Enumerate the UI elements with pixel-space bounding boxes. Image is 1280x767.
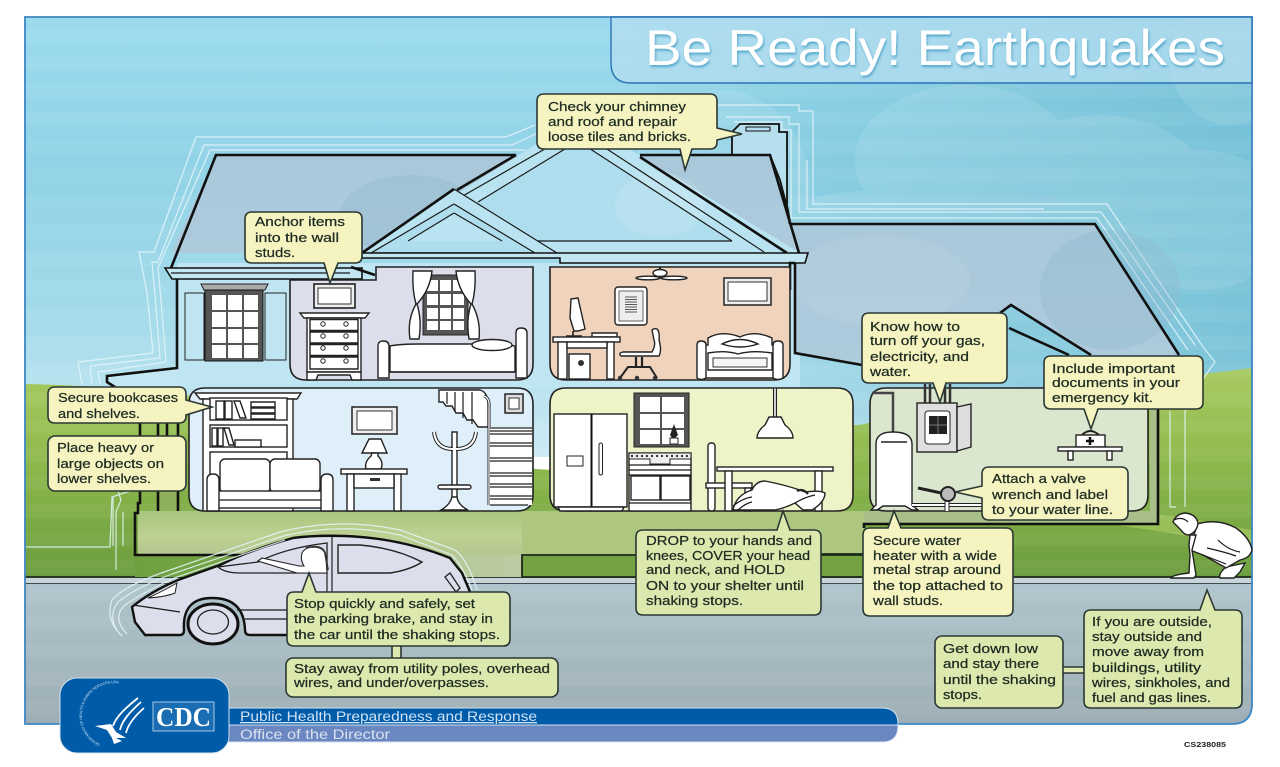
HHS seal: DEPARTMENT OF HEALTH & HUMAN SERVICES USA — [79, 680, 119, 746]
rear foot — [1220, 563, 1245, 578]
callout: water heater strap: Secure water — [873, 533, 962, 548]
callout: stop the car: the car until the shaking stops. — [294, 627, 500, 642]
small gable — [362, 189, 557, 253]
picture — [314, 284, 355, 308]
dresser — [300, 313, 369, 380]
connector between car callouts — [392, 645, 401, 659]
side table — [341, 469, 407, 511]
callout: anchor items — [245, 212, 362, 283]
document code: CS238085 — [1184, 742, 1226, 749]
books — [212, 401, 275, 447]
connector between drop and heater callouts — [821, 553, 863, 555]
callout: stop the car: the parking brake, and stay in — [294, 611, 493, 626]
CDC logo — [60, 678, 230, 754]
footer bars — [225, 708, 898, 742]
clouds — [636, 84, 1251, 290]
callout: stay away from utility poles — [286, 658, 558, 697]
left wall outline — [107, 279, 177, 387]
room: basement utility — [870, 384, 1148, 511]
eaves — [165, 253, 808, 279]
callout: heavy objects: lower shelves. — [57, 471, 151, 486]
bed — [378, 328, 527, 378]
callout: if you are outside: If you are outside, — [1092, 614, 1212, 629]
callout: check chimney and roof: Check your chimney — [548, 99, 687, 114]
staircase — [439, 390, 532, 505]
callout: stop the car: Stop quickly and safely, set — [294, 596, 475, 611]
room: living room — [189, 388, 533, 511]
house — [107, 118, 1180, 577]
callout: get down low: and stay there — [943, 656, 1039, 671]
callout: anchor items: Anchor items — [255, 214, 346, 229]
callout: drop cover hold: knees, COVER your head — [646, 548, 810, 563]
callout: anchor items: studs. — [255, 245, 295, 260]
room: upstairs office — [550, 267, 790, 380]
main roof — [171, 155, 799, 253]
desk chair — [618, 329, 660, 380]
refrigerator — [554, 414, 627, 511]
callout: drop cover hold — [636, 511, 821, 615]
callout: get down low — [935, 636, 1063, 708]
callout: drop cover hold: shaking stops. — [646, 593, 743, 608]
hills and grass — [25, 368, 1252, 580]
callout: get down low: until the shaking — [943, 672, 1056, 687]
lower wing roof — [791, 224, 1179, 365]
title banner — [611, 17, 1252, 83]
callout: get down low: stops. — [943, 687, 982, 702]
callout: utilities shutoff: Know how to — [870, 319, 960, 334]
callout: if you are outside: stay outside and — [1092, 629, 1202, 644]
car — [132, 536, 470, 644]
legs and torso — [1190, 522, 1252, 568]
room: kitchen — [550, 388, 853, 511]
electrical panel — [917, 384, 971, 452]
bookcase — [195, 393, 301, 511]
exterior window with shutters — [185, 284, 286, 361]
callout: if you are outside: buildings, utility — [1092, 660, 1202, 675]
first aid kit on shelf — [1058, 431, 1122, 460]
front arm and hand — [1171, 535, 1196, 578]
callout: utilities shutoff: electricity, and — [870, 349, 969, 364]
callout: emergency kit: Include important — [1052, 361, 1175, 376]
framed picture — [724, 278, 771, 305]
callout: if you are outside: move away from — [1092, 644, 1204, 659]
yard behind house — [138, 511, 522, 555]
callout: valve wrench: to your water line. — [992, 502, 1113, 517]
callout: stay away from utility poles: Stay away from utility poles, overhead — [294, 661, 550, 676]
callout: emergency kit: documents in your — [1052, 375, 1181, 390]
callout: if you are outside: fuel and gas lines. — [1092, 690, 1211, 705]
room: upstairs bedroom — [290, 267, 533, 380]
coat rack — [434, 432, 476, 510]
gable base band — [388, 240, 732, 242]
callout: water heater strap: wall studs. — [872, 593, 943, 608]
large gable — [362, 118, 800, 253]
callout: heavy objects: Place heavy or — [57, 440, 155, 455]
callout: if you are outside — [1084, 590, 1242, 708]
footer office name: Office of the Director — [240, 727, 391, 742]
sky — [25, 17, 1252, 457]
callout: water heater strap: heater with a wide — [873, 548, 997, 563]
title banner: Be Ready! Earthquakes — [645, 20, 1225, 76]
callout: if you are outside: wires, sinkholes, and — [1091, 675, 1230, 690]
callout: check chimney and roof: and roof and repair — [548, 114, 678, 129]
kitchen window — [634, 393, 689, 447]
pendant lamp — [757, 388, 793, 438]
callout: utilities shutoff — [862, 313, 1007, 402]
driver — [258, 547, 328, 573]
small picture — [505, 394, 523, 413]
callout: utilities shutoff: turn off your gas, — [870, 333, 985, 348]
white shake lines around the house — [26, 105, 1215, 570]
callout: drop cover hold: ON to your shelter until — [646, 578, 804, 593]
connector between outdoor callouts — [1062, 667, 1085, 673]
callout: secure bookcases — [48, 387, 212, 423]
callout: water heater strap: metal strap around — [873, 562, 1001, 577]
callout: water heater strap — [863, 511, 1013, 616]
CDC wordmark: CDC — [156, 702, 211, 732]
footer program name: Public Health Preparedness and Response — [240, 709, 537, 724]
callout: get down low: Get down low — [943, 641, 1039, 656]
water pipe — [872, 393, 893, 432]
ceiling fan — [636, 267, 687, 280]
callout: emergency kit — [1044, 356, 1203, 429]
callout: valve wrench: wrench and label — [991, 487, 1108, 502]
sofa — [207, 459, 333, 511]
computer desk — [553, 298, 620, 379]
callout: secure bookcases: and shelves. — [58, 406, 140, 421]
bedroom window with curtains — [409, 271, 479, 339]
water heater — [871, 432, 918, 510]
water line and valve wrench — [912, 487, 984, 511]
callout: check chimney and roof — [537, 94, 742, 170]
callout: water heater strap: the top attached to — [873, 578, 1003, 593]
callout: drop cover hold: DROP to your hands and — [646, 533, 812, 548]
table lamp — [362, 439, 387, 469]
callout: secure bookcases: Secure bookcases — [58, 390, 179, 405]
callout: stay away from utility poles: wires, and under/overpasses. — [293, 675, 489, 690]
wheel — [188, 604, 238, 644]
stove — [629, 453, 691, 511]
callout: drop cover hold: and neck, and HOLD — [646, 562, 785, 577]
callout: valve wrench: Attach a valve — [992, 471, 1086, 486]
callout: utilities shutoff: water. — [869, 364, 911, 379]
person crouching outside — [1171, 513, 1252, 578]
car shake lines — [110, 524, 477, 636]
table and chair with person in cover — [706, 443, 833, 511]
road — [25, 577, 1252, 727]
head — [1173, 513, 1198, 535]
office bed — [697, 334, 783, 380]
callout: stop the car — [287, 573, 510, 646]
picture — [615, 287, 647, 325]
callout: check chimney and roof: loose tiles and bricks. — [548, 129, 691, 144]
HHS seal — [79, 680, 144, 746]
callout: heavy objects: large objects on — [57, 456, 164, 471]
house upper wall — [177, 263, 800, 388]
callout: heavy objects — [48, 436, 186, 491]
callout: anchor items: into the wall — [255, 230, 339, 245]
chimney — [732, 124, 787, 207]
picture — [352, 407, 397, 434]
callout: emergency kit: emergency kit. — [1052, 390, 1153, 405]
callout: valve wrench — [955, 467, 1128, 520]
